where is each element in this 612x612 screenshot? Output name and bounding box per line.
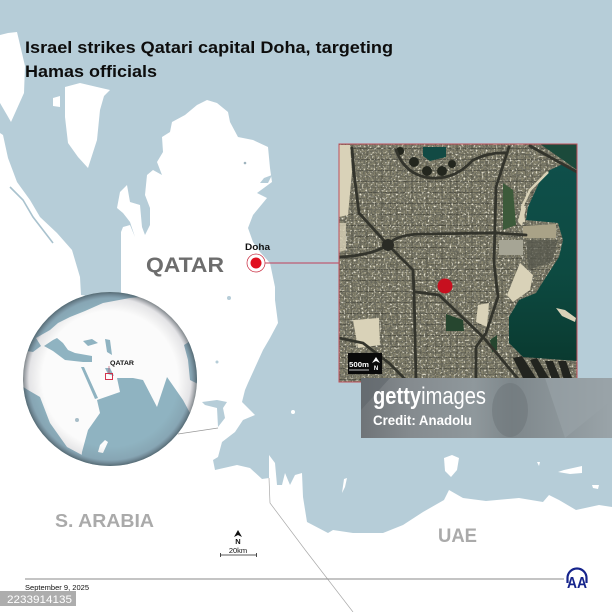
sea: Caspian (105, 339, 112, 355)
sea: Red Sea (81, 367, 98, 399)
sea: Mediterranean (44, 338, 92, 362)
label: QATAR: QATAR (146, 254, 224, 277)
beach (522, 172, 548, 222)
watermark band: gettyimages (373, 383, 486, 410)
map: inlets and coastal channels (10, 162, 272, 427)
water: bay beneath the globe (202, 400, 227, 427)
ocean: Indian Ocean (82, 377, 191, 466)
scale box in inset (348, 353, 382, 374)
panel: satellite inset (339, 144, 577, 382)
land: Bahrain and nearby coast (65, 83, 110, 168)
logo: Anadolu Agency: AA (567, 575, 587, 592)
roads (339, 146, 577, 380)
marker: Doha strike location (247, 254, 265, 272)
ocean: Atlantic (23, 387, 84, 462)
water: Saudi coastal channel (10, 187, 53, 243)
sea: Persian Gulf (105, 368, 114, 376)
bottom right towers (513, 356, 572, 380)
label: S. ARABIA: S. ARABIA (55, 510, 154, 531)
image id tag (0, 591, 76, 606)
globe locator (20, 285, 200, 470)
border: UAE and Saudi Arabia (269, 478, 353, 612)
land: Qatar and southern coast (117, 100, 612, 612)
connector from globe to map (178, 428, 218, 434)
locator box (106, 374, 112, 380)
land: Saudi west coast (0, 133, 122, 612)
scale box in inset: 500m (349, 362, 369, 369)
label: Doha: Doha (245, 242, 271, 253)
scale bar and north arrow: N (235, 537, 241, 546)
lake: Victoria (75, 418, 79, 422)
land: small island (53, 96, 60, 107)
land: islands east (444, 455, 459, 477)
scale bar and north arrow (220, 530, 256, 557)
water: Qatar east coast notches (260, 175, 272, 183)
connector line from Doha to satellite inset (265, 262, 339, 264)
title: Hamas officials (25, 62, 157, 81)
watermark band: Credit: Anadolu (373, 413, 472, 428)
island: Madagascar (98, 440, 108, 453)
title: Israel strikes Qatari capital Doha, targeting (25, 38, 393, 57)
footer rule (25, 578, 564, 580)
pointer to Qatar (108, 366, 110, 373)
parks (503, 183, 516, 230)
ocean: east edge (184, 342, 197, 384)
sea: Black Sea (83, 339, 98, 346)
label: UAE: UAE (438, 526, 477, 547)
ocean: north Atlantic and Arctic (28, 292, 139, 352)
sand and open ground (339, 145, 576, 348)
water: inland dots (244, 162, 246, 164)
watermark band (361, 378, 612, 438)
scale bar and north arrow: 20km (229, 546, 247, 555)
label: QATAR on globe: QATAR (110, 360, 134, 367)
sea in inset (509, 164, 577, 361)
palm district (396, 147, 456, 176)
land: northern coast at top left (0, 32, 25, 122)
logo: Anadolu Agency (567, 568, 587, 592)
inset border (339, 144, 577, 382)
top right green water (540, 144, 577, 170)
image id tag: 2233914135 (7, 594, 72, 606)
title (25, 38, 393, 81)
scale box in inset: N (374, 366, 378, 372)
date: September 9, 2025 (25, 583, 89, 592)
urban texture (339, 144, 577, 382)
strike point (438, 278, 452, 294)
